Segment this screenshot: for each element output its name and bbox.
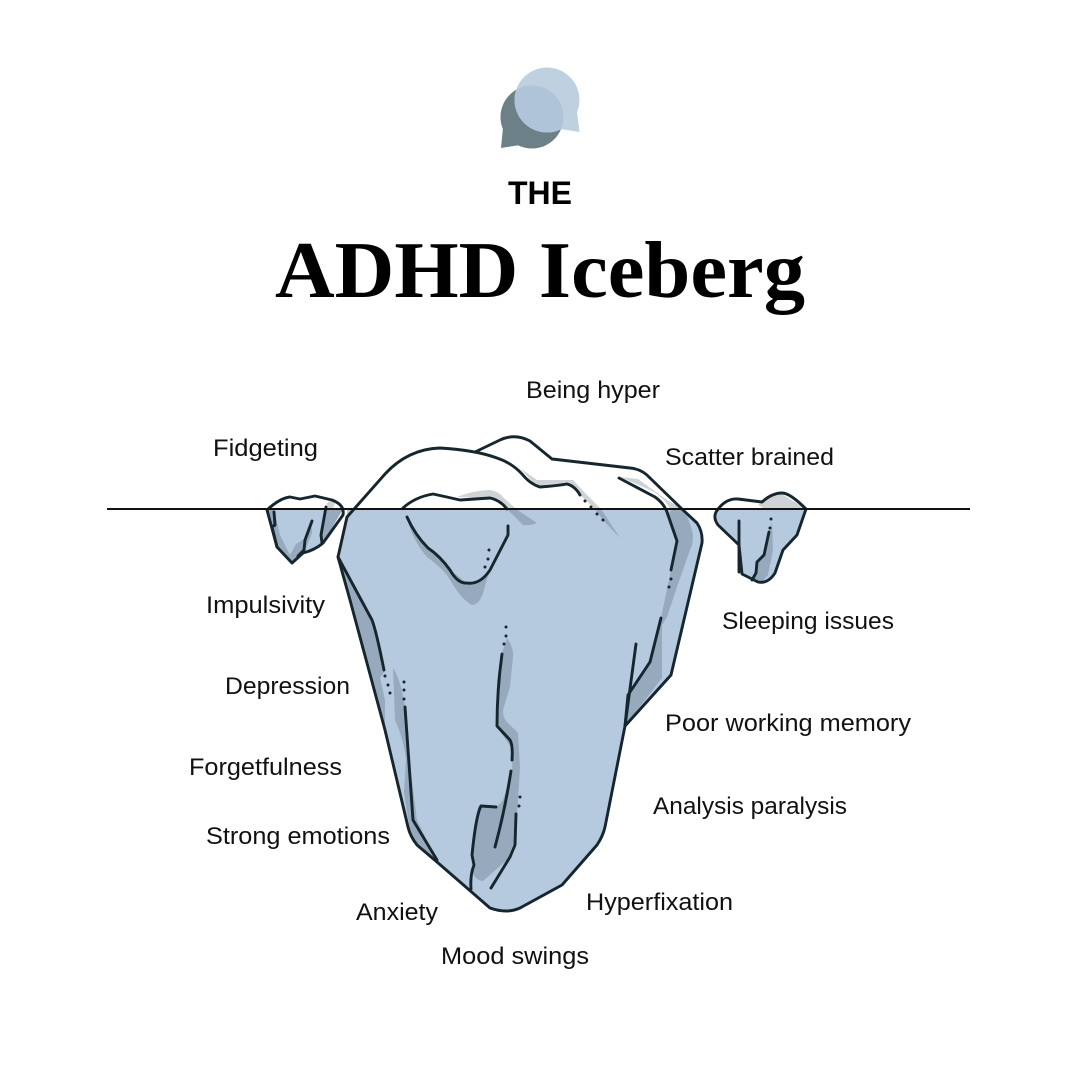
cracks and fracture lines <box>272 478 769 889</box>
small left iceberg outline <box>267 496 343 563</box>
shaded facets <box>267 509 773 881</box>
fracture dots <box>384 500 772 808</box>
main iceberg outline <box>338 437 702 911</box>
label: Poor working memory: Poor working memory <box>665 710 911 737</box>
icon: speech bubbles logo <box>500 68 580 148</box>
label: Hyperfixation: Hyperfixation <box>586 889 733 916</box>
label: Scatter brained: Scatter brained <box>665 444 834 471</box>
label: Impulsivity: Impulsivity <box>206 592 325 619</box>
iceberg illustration <box>107 437 970 911</box>
small right iceberg outline <box>715 493 806 582</box>
label: Fidgeting: Fidgeting <box>213 435 318 462</box>
label: Sleeping issues: Sleeping issues <box>722 608 894 635</box>
label: Mood swings: Mood swings <box>441 943 589 970</box>
heading: THE: THE <box>508 175 572 211</box>
label: Anxiety: Anxiety <box>356 899 438 926</box>
main iceberg underwater body <box>338 509 702 911</box>
water line <box>107 508 970 510</box>
label: Analysis paralysis: Analysis paralysis <box>653 793 847 820</box>
label: Depression: Depression <box>225 673 350 700</box>
label: Strong emotions: Strong emotions <box>206 823 390 850</box>
label: Being hyper: Being hyper <box>526 377 660 404</box>
label: Forgetfulness: Forgetfulness <box>189 754 342 781</box>
small left iceberg underwater body <box>267 509 343 563</box>
title: ADHD Iceberg <box>275 227 805 315</box>
small right iceberg underwater body <box>715 509 806 582</box>
light grey shadows above water <box>326 468 806 509</box>
